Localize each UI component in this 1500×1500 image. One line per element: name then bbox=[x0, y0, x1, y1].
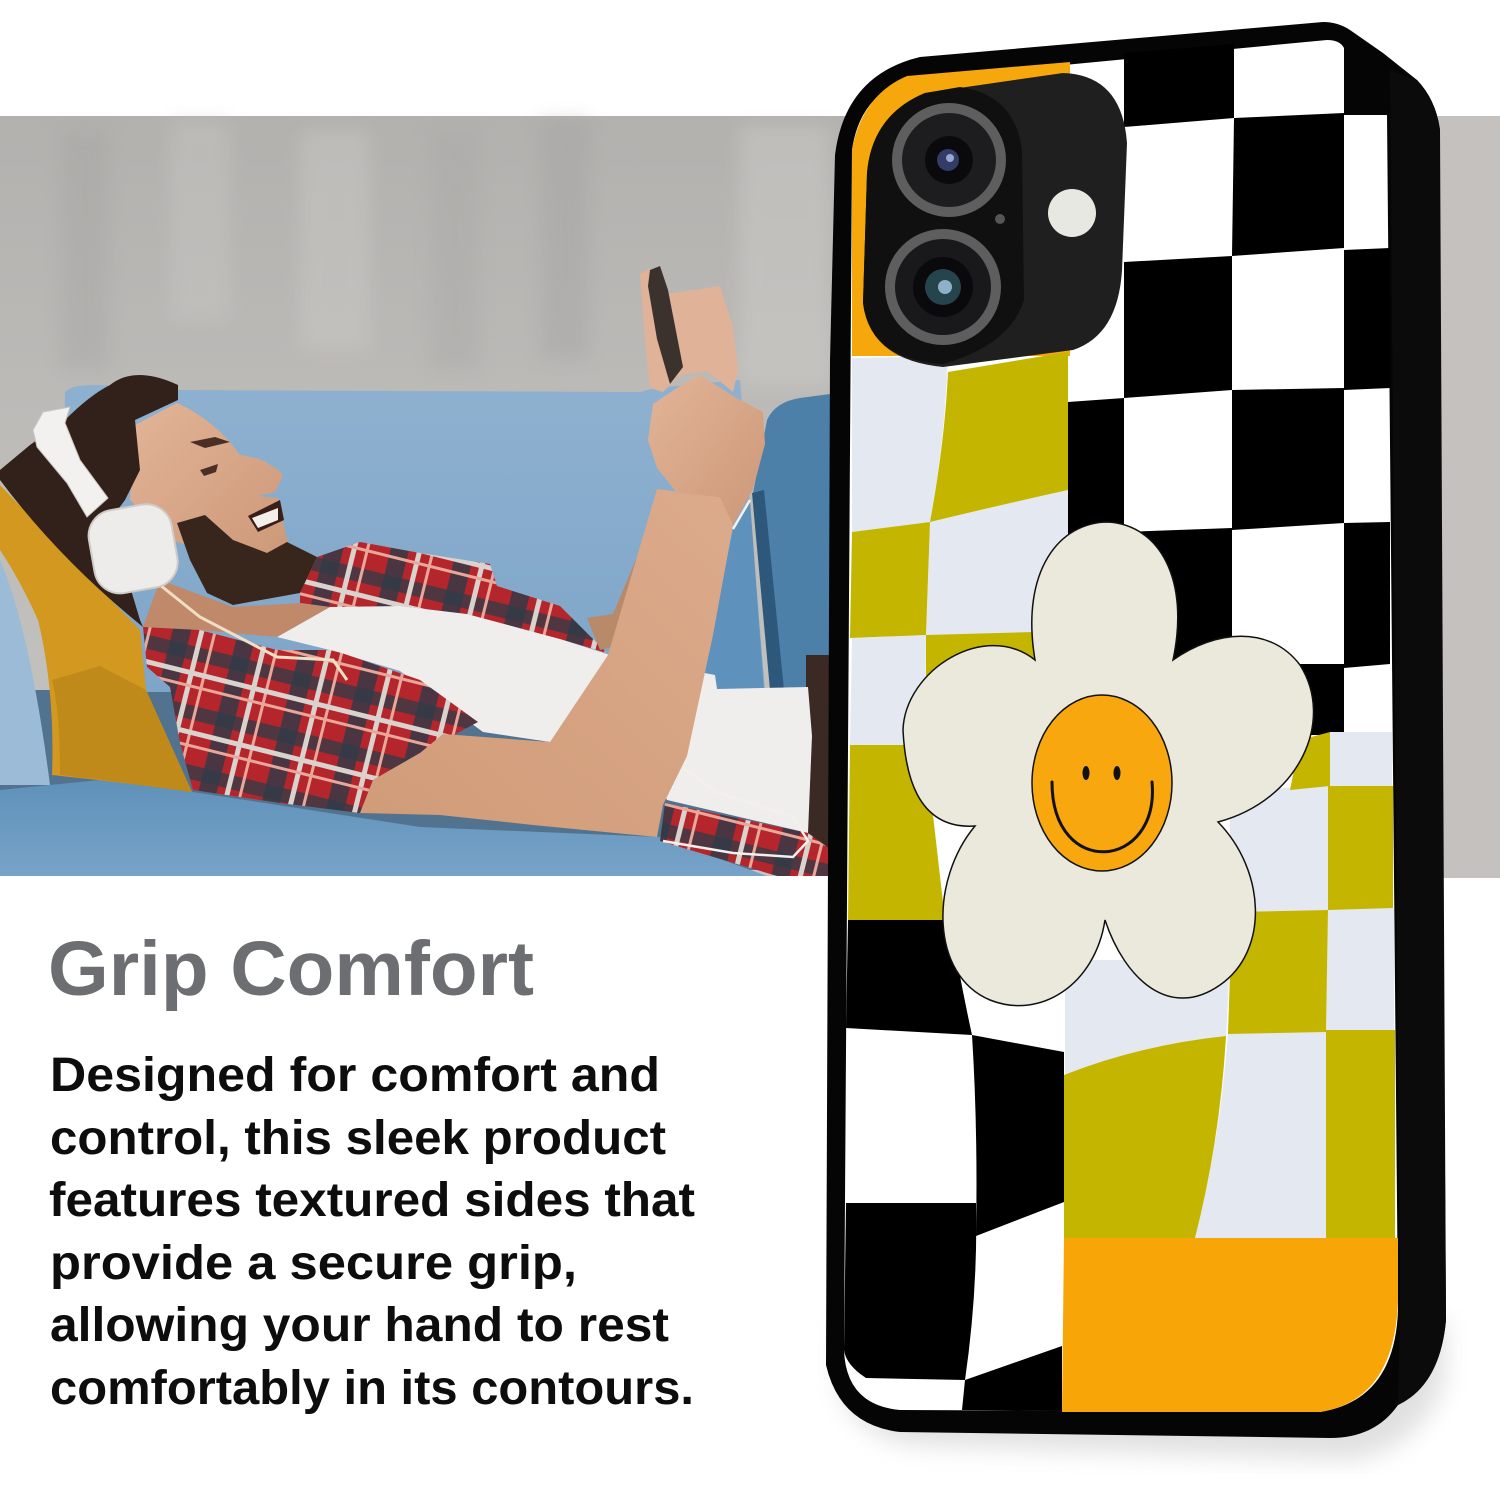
back forearm bbox=[587, 489, 690, 650]
lower lens bbox=[885, 229, 1001, 345]
mouth bbox=[248, 500, 284, 532]
wall background bbox=[0, 116, 860, 876]
orange top left bbox=[852, 62, 1070, 356]
photo panel: man relaxing on sofa bbox=[0, 116, 1500, 878]
plaid sleeve bbox=[143, 627, 478, 813]
jeans bbox=[806, 655, 832, 850]
upper arm and forearm bbox=[360, 489, 733, 837]
case body bbox=[826, 22, 1446, 1438]
t-shirt bbox=[277, 606, 812, 833]
case drop shadow bbox=[840, 1320, 1445, 1460]
eye and brow bbox=[190, 437, 230, 476]
body text: allowing your hand to rest bbox=[50, 1299, 669, 1352]
white base bbox=[844, 40, 1398, 1412]
shirt collar plaid bbox=[300, 542, 607, 653]
eyes bbox=[1082, 766, 1090, 780]
phone in hand bbox=[648, 266, 683, 384]
left cushion bbox=[0, 560, 50, 785]
camera island bbox=[863, 73, 1127, 367]
back artwork bbox=[844, 40, 1398, 1412]
lens housing bbox=[863, 87, 1024, 364]
headphone ear cup bbox=[85, 500, 182, 597]
upper lens bbox=[892, 103, 1006, 217]
body text: provide a secure grip, bbox=[50, 1237, 577, 1290]
heading: Grip Comfort bbox=[48, 926, 534, 1012]
phone case bbox=[826, 22, 1446, 1460]
island bbox=[863, 73, 1127, 367]
body text: control, this sleek product bbox=[50, 1112, 666, 1165]
body text: Designed for comfort and bbox=[50, 1049, 660, 1102]
earphone cable left bbox=[150, 577, 347, 680]
petals bbox=[903, 522, 1314, 1006]
smile bbox=[1052, 782, 1152, 852]
wall right of phone bbox=[1430, 116, 1500, 878]
earphone cable right bbox=[663, 500, 808, 857]
pale cells bbox=[850, 356, 1394, 1238]
upper checker black cells bbox=[1068, 44, 1390, 735]
fist bbox=[648, 375, 765, 525]
headphones band bbox=[33, 407, 108, 517]
beard bbox=[177, 515, 317, 605]
body text bbox=[49, 1049, 695, 1415]
sofa seat bbox=[0, 780, 767, 876]
body text: features textured sides that bbox=[49, 1174, 695, 1227]
hair bbox=[0, 375, 178, 627]
orange bottom block bbox=[1062, 1238, 1398, 1412]
sofa back cushion bbox=[60, 380, 765, 692]
flash bbox=[1048, 189, 1096, 237]
microphone bbox=[995, 214, 1005, 224]
body text: comfortably in its contours. bbox=[50, 1362, 694, 1415]
lower left checker bbox=[844, 920, 1064, 1411]
olive cells bbox=[848, 352, 1395, 1238]
upper hand bbox=[640, 268, 738, 392]
yellow pillow bbox=[0, 485, 192, 792]
flower smiley bbox=[903, 522, 1314, 1006]
lower sofa shadow backing bbox=[0, 690, 830, 870]
face bbox=[1032, 695, 1172, 871]
neck bbox=[143, 580, 330, 637]
face bbox=[130, 403, 290, 560]
lower plaid shirt bbox=[660, 803, 830, 876]
sofa arm bbox=[753, 394, 830, 700]
